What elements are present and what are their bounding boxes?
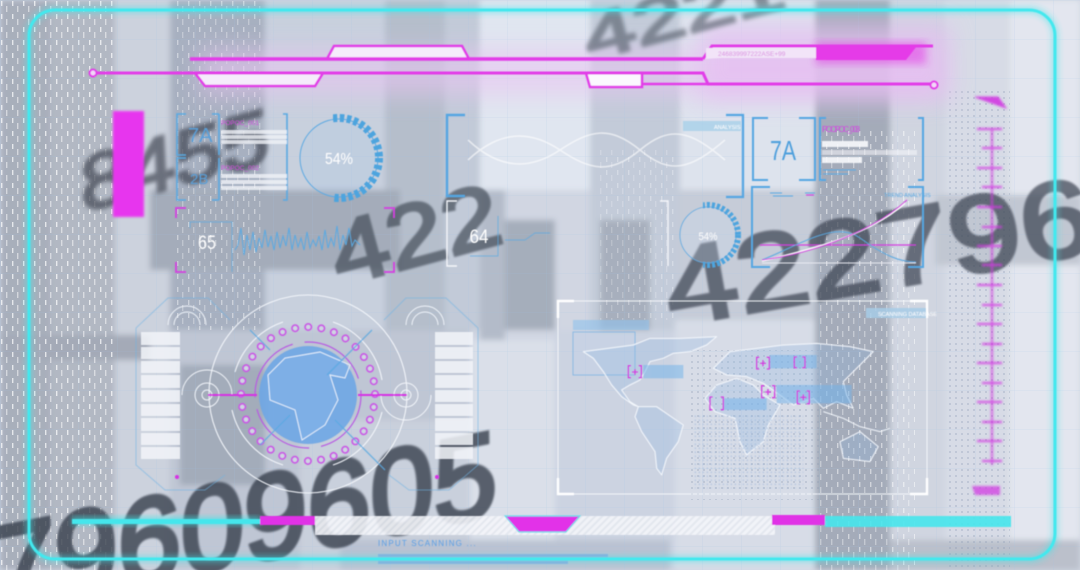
readout 2B: 2B xyxy=(190,171,208,188)
world map panel: SCANNING DATABASE xyxy=(878,312,937,318)
value 65: 65 xyxy=(198,233,216,254)
right magenta segment xyxy=(772,515,825,525)
big left bracket xyxy=(447,115,465,196)
hatched white centre bar xyxy=(315,516,775,535)
label POPOC_002: POPOC_002 xyxy=(221,165,259,172)
label POPOC_001: POPOC_001 xyxy=(221,120,259,127)
label POOPOC_003: POOPOC_003 xyxy=(822,124,860,134)
left magenta segment xyxy=(260,516,315,525)
top magenta circuit header: 246839997222ASE+99 xyxy=(718,51,786,58)
lower centre tab xyxy=(586,73,642,87)
right data panels: ANALYSIS xyxy=(714,125,741,131)
white corner frame xyxy=(558,301,927,494)
centre trapezoid xyxy=(505,516,580,532)
bottom caption text: INPUT SCANNING ... xyxy=(378,539,477,548)
small bottom nodes xyxy=(175,475,179,479)
top magenta circuit header xyxy=(90,42,938,88)
bars xyxy=(221,174,287,190)
globe xyxy=(259,346,357,444)
upper magenta line xyxy=(190,57,703,61)
right cyan segment xyxy=(825,516,1011,527)
gauge value: 54% xyxy=(325,151,353,168)
left target xyxy=(182,370,232,407)
blue trace xyxy=(470,216,550,256)
value 64: 64 xyxy=(470,227,489,248)
world map xyxy=(583,337,890,488)
readout panel bracket xyxy=(190,222,232,272)
outer rings xyxy=(209,295,407,493)
right data panels xyxy=(678,115,931,267)
tall right bracket xyxy=(726,115,743,197)
readout 7A: 7A xyxy=(188,125,213,147)
left cyan segment xyxy=(72,516,260,526)
database label xyxy=(866,308,926,318)
world map panel xyxy=(558,301,937,494)
line end node left xyxy=(90,70,96,76)
right stack of bars xyxy=(435,332,473,459)
magenta segment ring xyxy=(241,327,375,461)
left data panel: code readouts xyxy=(177,114,287,200)
line end node right xyxy=(930,82,938,88)
upper header tab xyxy=(327,46,469,59)
analysis label xyxy=(683,121,741,131)
waveform line xyxy=(235,226,360,255)
earth scanner widget xyxy=(136,295,478,493)
marker highlight strips xyxy=(643,355,852,410)
code bracket xyxy=(820,118,923,180)
magenta block xyxy=(113,111,144,217)
big floating digits: 422796 right: 422796 xyxy=(655,154,1080,349)
big floating digits: 422 centre: 422 xyxy=(319,164,511,304)
lower magenta line xyxy=(93,73,934,84)
magenta pointers xyxy=(208,394,407,396)
left inset box xyxy=(573,332,635,375)
map markers xyxy=(628,357,809,410)
radar arcs xyxy=(168,306,444,325)
upper right label tab xyxy=(703,46,933,59)
lower left tab xyxy=(195,73,323,86)
magenta corners xyxy=(176,208,394,272)
gauge 54% xyxy=(299,118,379,198)
bracket pair lower xyxy=(177,158,219,200)
blue cross lines xyxy=(250,330,385,470)
bottom status bar xyxy=(72,515,1011,535)
line chart: TREND ANALYSIS xyxy=(884,193,931,199)
white bars xyxy=(822,141,917,163)
right ruler xyxy=(972,97,1006,495)
white corners xyxy=(447,201,668,266)
right target xyxy=(381,383,431,420)
right bracket xyxy=(283,114,287,200)
blue outline frames xyxy=(136,298,478,490)
bracket pair upper xyxy=(177,114,219,155)
left stack of bars xyxy=(141,332,180,459)
gauge small 54% xyxy=(678,205,738,265)
DNA helix xyxy=(468,133,725,167)
line chart xyxy=(752,187,931,267)
waveform panel xyxy=(176,208,394,272)
globe continents xyxy=(268,352,350,440)
bars xyxy=(221,130,287,144)
small panel 64 xyxy=(447,115,668,266)
big floating digits: 8455: 8455 xyxy=(78,92,271,229)
blue caption lines xyxy=(823,170,856,174)
bottom caption text xyxy=(378,539,608,564)
7A bracket xyxy=(753,118,815,180)
value 7A: 7A xyxy=(770,135,796,166)
gauge small 54%: 54% xyxy=(698,231,718,243)
